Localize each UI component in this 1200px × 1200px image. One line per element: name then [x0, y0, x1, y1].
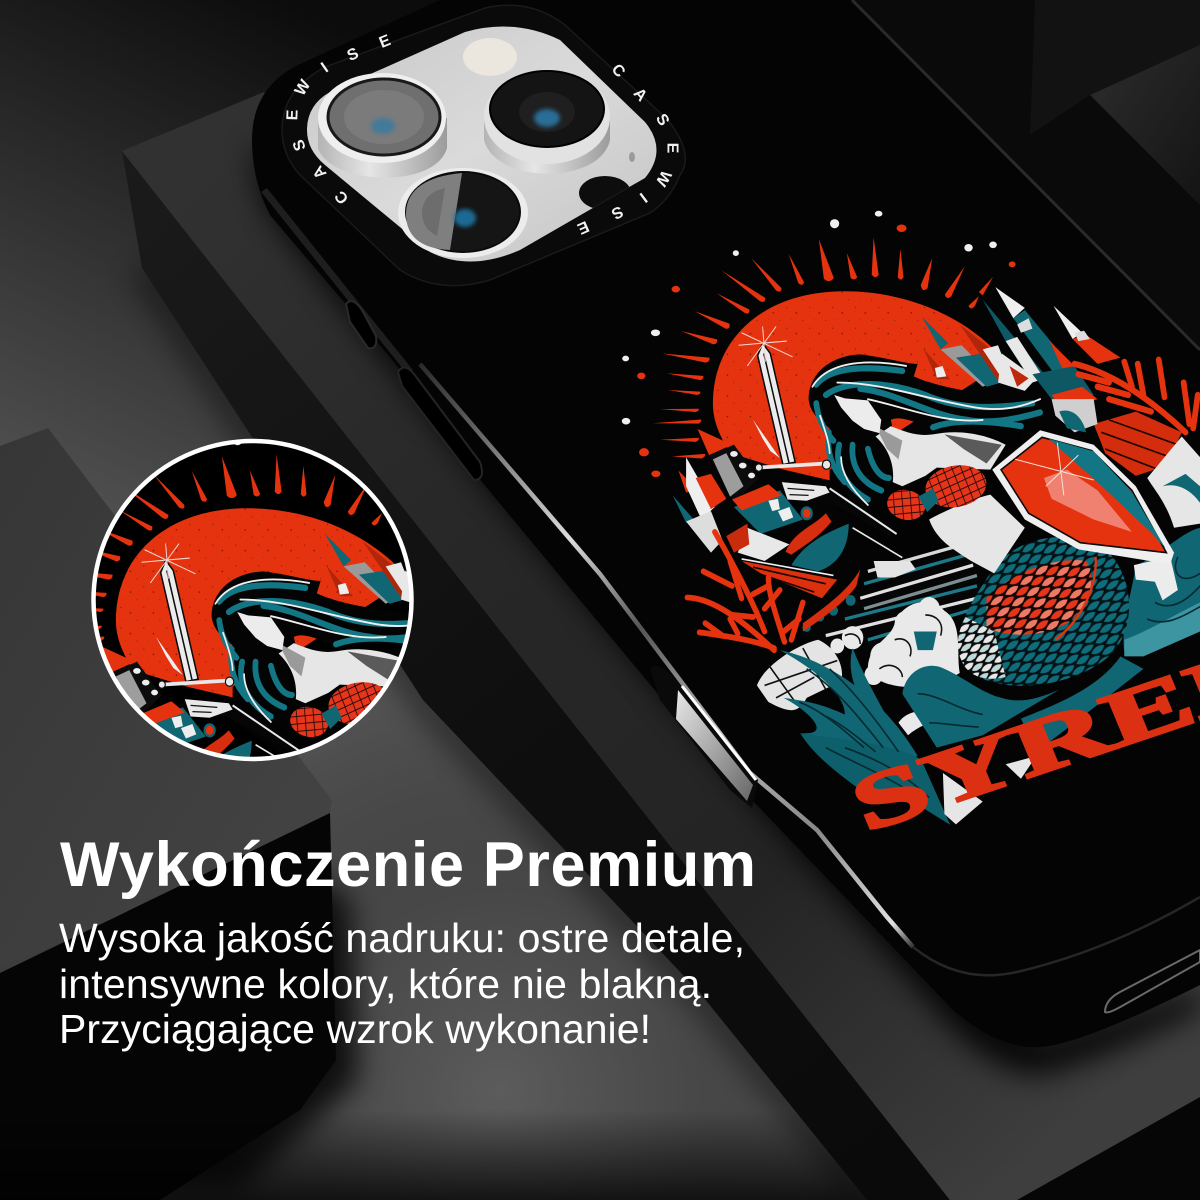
CASEWISE ring lettering: A — [630, 85, 650, 105]
teal wave beneath tail — [902, 656, 1143, 752]
body copy — [59, 915, 745, 1052]
body copy: Wysoka jakość nadruku: ostre detale, — [59, 915, 745, 961]
screen edge line — [913, 897, 1200, 975]
CASEWISE ring lettering: E — [664, 143, 680, 154]
CASEWISE ring lettering: S — [608, 202, 626, 222]
side button: long slot — [398, 367, 482, 480]
CASEWISE ring lettering: W — [292, 76, 315, 99]
CASEWISE ring lettering: S — [652, 111, 672, 129]
CASEWISE ring lettering: C — [332, 187, 352, 207]
mermaid face — [834, 395, 881, 433]
right waves and shell — [1124, 436, 1200, 656]
lens: top left — [318, 73, 447, 178]
CASEWISE ring lettering: S — [290, 137, 310, 153]
right castle towers — [921, 287, 1120, 399]
sun disc — [713, 291, 1006, 482]
sword — [753, 343, 831, 471]
white scraps beneath the title — [943, 756, 1036, 824]
CASEWISE ring lettering — [284, 32, 680, 237]
left castle town — [673, 429, 812, 561]
stripes panel — [799, 540, 981, 652]
white barrel — [757, 640, 842, 710]
CASEWISE ring lettering: I — [318, 60, 332, 76]
scattered dots — [622, 211, 1016, 477]
left kelp — [780, 648, 950, 825]
white foam waves — [830, 597, 960, 735]
mermaid hair — [809, 354, 1048, 509]
sword sparkle — [739, 327, 792, 366]
CASEWISE ring lettering: C — [608, 61, 628, 81]
upper right blocks behind phone — [852, 0, 1200, 350]
bottom port — [1105, 950, 1200, 1012]
camera bump — [282, 5, 685, 286]
red coral fan — [1094, 412, 1182, 476]
CASEWISE ring lettering: E — [284, 109, 302, 121]
flash — [463, 38, 517, 76]
CASEWISE ring lettering: W — [651, 167, 674, 190]
mermaid arm and hand — [780, 482, 902, 558]
red wave and teal leaf — [786, 513, 849, 571]
silver side button — [650, 666, 758, 808]
CASEWISE ring lettering: E — [574, 217, 591, 237]
CASEWISE ring lettering: S — [345, 45, 362, 65]
lens: bottom — [398, 168, 528, 258]
heading: Wykończenie Premium — [60, 830, 756, 900]
mermaid chest and neck — [876, 426, 1006, 486]
side button: small slot — [346, 301, 376, 348]
black backing behind the figure — [830, 432, 1021, 557]
shield — [992, 430, 1174, 564]
mermaid belly — [929, 495, 1025, 573]
right coral — [1075, 360, 1198, 432]
small house behind hair — [1052, 387, 1098, 432]
microphone dot — [629, 152, 635, 162]
artwork: mermaid print on the case — [622, 211, 1200, 825]
body copy: intensywne kolory, które nie blakną. — [59, 961, 712, 1007]
mermaid tail scales — [958, 537, 1129, 686]
lower left block — [0, 428, 900, 1200]
glossy rim highlight — [420, 364, 913, 947]
sun rays — [653, 237, 993, 458]
shield sparkle — [1015, 443, 1094, 495]
black camera ring — [282, 5, 685, 286]
red boat — [742, 559, 837, 598]
mermaid bikini — [885, 461, 989, 523]
lens: top right — [484, 70, 610, 174]
lidar hole — [579, 176, 631, 210]
circular detail inset — [91, 438, 414, 762]
CASEWISE ring lettering: I — [636, 189, 650, 205]
glossy side band — [264, 190, 410, 372]
CASEWISE ring lettering: E — [377, 32, 393, 52]
phone case silhouette — [252, 0, 1200, 1047]
CASEWISE ring lettering: A — [309, 162, 330, 182]
left coral — [687, 532, 803, 650]
phone body — [252, 0, 1200, 1047]
right edge highlight — [852, 0, 1200, 350]
silver camera plate — [307, 27, 656, 262]
phone shadow — [252, 140, 1200, 1075]
body copy: Przyciągające wzrok wykonanie! — [59, 1006, 651, 1052]
